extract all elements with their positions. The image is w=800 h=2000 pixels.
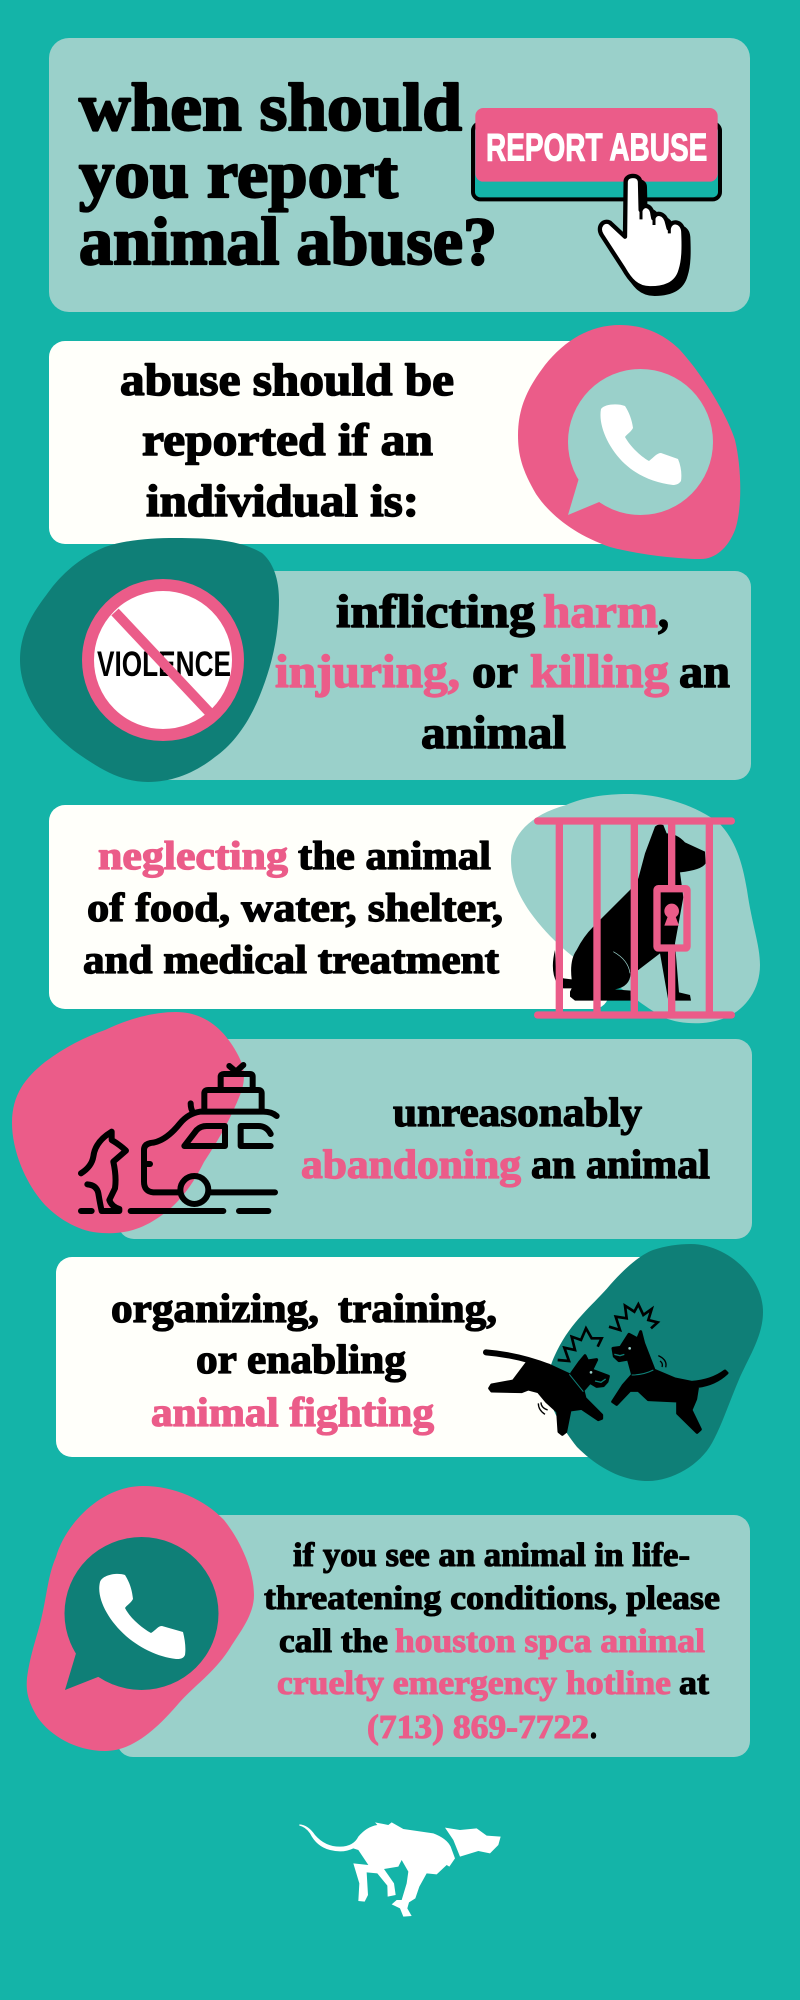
heading: abuse should be reported: individual is:: [146, 475, 419, 526]
text: inflicting harm, injuring, or killing an animal: harm: [543, 586, 658, 638]
text: inflicting harm, injuring, or killing an animal: or: [472, 646, 518, 698]
icon: report abuse button with hand: REPORT ABUSE: [486, 126, 707, 170]
text: inflicting harm, injuring, or killing an animal: injuring,: [275, 646, 460, 698]
text: unreasonably abandoning an animal: an animal: [531, 1141, 710, 1187]
title: you report: [79, 136, 398, 212]
icon: report abuse button with hand: [473, 108, 720, 294]
heading: abuse should be reported: reported if an: [142, 414, 433, 465]
panel: abuse should be reported: [49, 341, 619, 544]
icon: white running dog logo: [299, 1822, 501, 1917]
text: unreasonably abandoning an animal: [301, 1089, 710, 1187]
panel: neglecting: [49, 805, 609, 1009]
text: inflicting harm, injuring, or killing an animal: an: [679, 646, 730, 698]
text: neglecting the animal: [83, 833, 503, 982]
text: inflicting harm, injuring, or killing an animal: animal: [421, 707, 566, 759]
text: houston spca hotline call to action: at: [679, 1665, 710, 1702]
text: neglecting the animal: neglecting: [98, 833, 288, 878]
panel: abandoning: [118, 1039, 752, 1239]
panel: animal fighting: [56, 1257, 660, 1457]
text: houston spca hotline call to action: threatening conditions, please: [264, 1580, 720, 1617]
text: houston spca hotline call to action: if you see an animal in life-: [293, 1537, 690, 1574]
text: organizing, training, or enabling animal fighting: training,: [338, 1285, 497, 1331]
text: houston spca hotline call to action: (713) 869-7722: [367, 1709, 589, 1746]
title: animal abuse?: [79, 203, 497, 279]
text: organizing, training, or enabling animal fighting: or enabling: [196, 1336, 407, 1382]
icon: no violence on teal blob: VIOLENCE: [97, 645, 231, 684]
heading: abuse should be reported: abuse should be: [120, 354, 454, 405]
icon: car leaving cat on pink blob: [12, 1012, 277, 1233]
text: inflicting harm, injuring, or killing an animal: [275, 586, 730, 759]
text: inflicting harm, injuring, or killing an animal: ,: [658, 586, 669, 638]
text: neglecting the animal: of food, water, shelter,: [87, 885, 503, 930]
title: [79, 69, 497, 279]
icon: phone on pink blob, hotline: [27, 1486, 254, 1751]
text: unreasonably abandoning an animal: unreasonably: [393, 1089, 643, 1135]
text: houston spca hotline call to action: houston spca animal: [395, 1623, 705, 1660]
text: inflicting harm, injuring, or killing an animal: killing: [530, 646, 670, 698]
icon: no violence on teal blob: [20, 538, 279, 782]
text: neglecting the animal: and medical treatment: [83, 937, 500, 982]
text: unreasonably abandoning an animal: abandoning: [301, 1141, 522, 1187]
panel: title: [49, 38, 750, 312]
text: houston spca hotline call to action: cruelty emergency hotline: [277, 1665, 671, 1702]
text: inflicting harm, injuring, or killing an animal: inflicting: [336, 586, 536, 638]
text: neglecting the animal: the animal: [298, 833, 491, 878]
text: houston spca hotline call to action: .: [590, 1709, 597, 1746]
text: houston spca hotline call to action: call the: [279, 1623, 388, 1660]
text: organizing, training, or enabling animal fighting: animal fighting: [151, 1389, 435, 1435]
text: organizing, training, or enabling animal fighting: [111, 1285, 497, 1435]
icon: phone on pink blob: [518, 325, 740, 559]
panel: inflicting harm: [150, 571, 751, 780]
icon: fighting dogs on dark blob: [486, 1244, 763, 1481]
heading: abuse should be reported: [120, 354, 454, 526]
text: organizing, training, or enabling animal fighting: organizing,: [111, 1285, 319, 1331]
icon: dog in cage on light blob: [511, 794, 760, 1023]
panel: hotline: [117, 1515, 750, 1757]
text: houston spca hotline call to action: [264, 1537, 720, 1746]
title: when should: [79, 69, 462, 145]
